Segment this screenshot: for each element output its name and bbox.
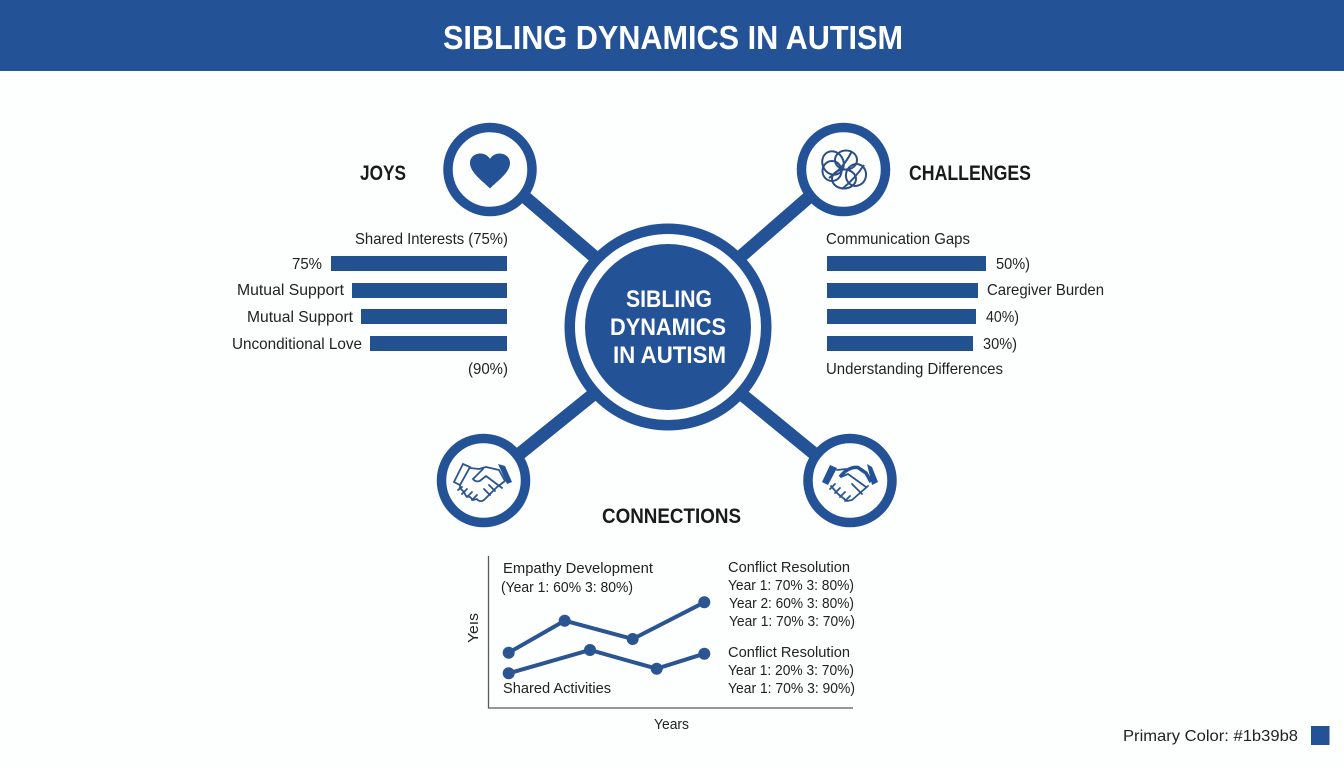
connector spokes	[484, 167, 850, 483]
header banner	[0, 0, 1344, 71]
label: conflict resolution upper: Year 1: 70% 3: 70%)	[729, 613, 855, 630]
label: empathy development: (Year 1: 60% 3: 80%)	[501, 579, 633, 596]
lower line series	[503, 644, 710, 679]
label: conflict resolution lower: Year 1: 20% 3: 70%)	[728, 662, 854, 679]
challenges heading: CHALLENGES	[909, 162, 1031, 185]
hub label: DYNAMICS	[610, 314, 726, 341]
challenges bars	[827, 256, 986, 351]
joys labels: 75%	[292, 256, 322, 273]
challenges labels: Caregiver Burden	[987, 282, 1104, 299]
icon: tangled knot	[802, 128, 886, 212]
label: conflict resolution upper: Year 2: 60% 3: 80%)	[729, 595, 854, 612]
joys labels: Shared Interests (75%)	[355, 231, 508, 248]
label: conflict resolution upper: Year 1: 70% 3: 80%)	[728, 577, 854, 594]
title: SIBLING DYNAMICS IN AUTISM	[443, 19, 903, 56]
challenges labels: 40%)	[986, 309, 1019, 326]
label: shared activities: Shared Activities	[503, 680, 611, 697]
joys labels	[232, 231, 508, 378]
label: conflict resolution upper: Conflict Resolution	[728, 559, 850, 576]
hub label: SIBLING	[626, 286, 712, 313]
challenges labels: Understanding Differences	[826, 361, 1003, 378]
challenges labels: 30%)	[983, 336, 1017, 353]
panel: connections line chart	[465, 556, 855, 733]
label: empathy development	[501, 560, 654, 596]
joys labels: (90%)	[468, 361, 508, 378]
primary color legend: Primary Color: #1b39b8	[1123, 728, 1298, 745]
challenges labels: Communication Gaps	[826, 231, 970, 248]
challenges labels: 50%)	[996, 256, 1030, 273]
label: conflict resolution upper	[728, 559, 855, 630]
hub label	[610, 286, 726, 369]
label: conflict resolution lower: Conflict Resolution	[728, 644, 850, 661]
upper line series	[503, 596, 710, 659]
panel: challenges	[826, 162, 1104, 378]
icon: heart	[448, 128, 532, 212]
panel: joys	[232, 162, 508, 378]
central hub	[564, 224, 772, 430]
icon: handshake filled	[808, 438, 892, 522]
chart axes	[488, 556, 853, 708]
joys labels: Mutual Support	[247, 309, 354, 326]
label: conflict resolution lower: Year 1: 70% 3: 90%)	[728, 680, 855, 697]
y axis label: Yeıs	[465, 613, 482, 643]
joys labels: Mutual Support	[237, 282, 345, 299]
x axis label: Years	[654, 716, 689, 733]
hub label: IN AUTISM	[613, 342, 726, 369]
icon: handshake outline	[442, 438, 526, 522]
label: empathy development: Empathy Development	[503, 560, 654, 577]
connections heading: CONNECTIONS	[602, 505, 741, 528]
label: conflict resolution lower	[728, 644, 855, 697]
joys heading: JOYS	[360, 162, 406, 185]
joys bars	[331, 256, 507, 351]
joys labels: Unconditional Love	[232, 336, 362, 353]
challenges labels	[826, 231, 1104, 378]
